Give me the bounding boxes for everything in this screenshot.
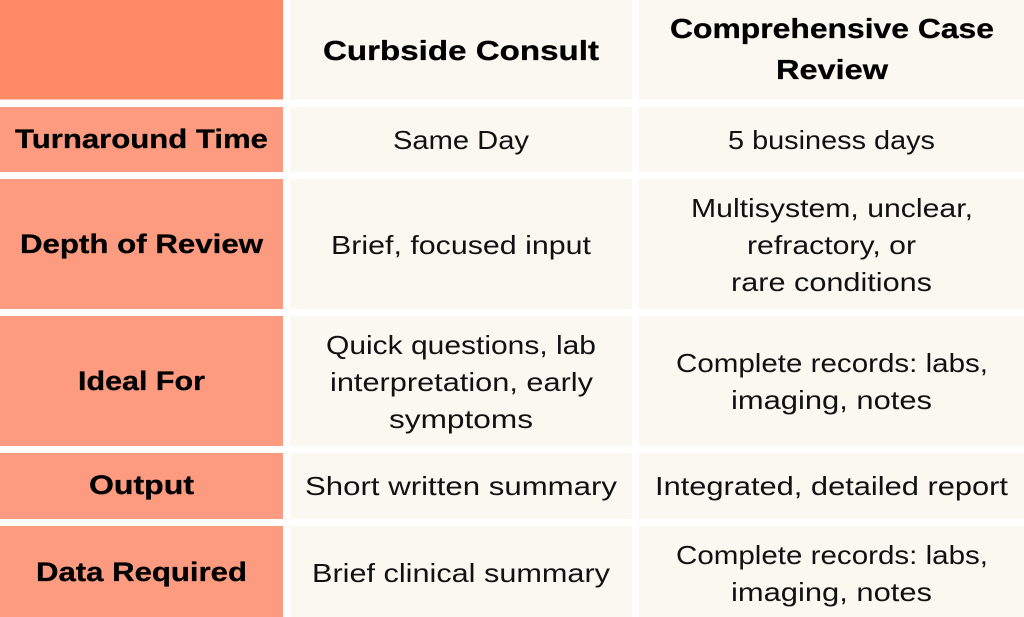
row: Depth of Review	[0, 179, 1024, 309]
empty header corner cell	[0, 0, 283, 100]
cell: Quick questions: symptoms	[389, 404, 533, 434]
column header: Comprehensive Case Review	[639, 0, 1024, 100]
cell: Multisystem conditions: rare conditions	[731, 267, 932, 297]
row label: Depth of Review: Depth of Review	[20, 229, 264, 259]
row label: Ideal For	[0, 316, 283, 446]
cell: Multisystem conditions: Multisystem, unclear,	[691, 193, 973, 223]
cell: Complete records: imaging, notes	[731, 385, 932, 415]
row label: Data Required: Data Required	[36, 557, 247, 587]
cell: Complete records: Complete records: labs,	[676, 540, 988, 570]
cell: Brief clinical summary	[290, 526, 632, 617]
cell: Quick questions: Quick questions, lab	[326, 330, 596, 360]
row label: Ideal For: Ideal For	[78, 366, 206, 396]
cell: Multisystem conditions: refractory, or	[747, 230, 916, 260]
column header: Comprehensive Case Review: Comprehensive Case	[670, 13, 994, 44]
cell: Complete records	[639, 526, 1024, 617]
row label: Turnaround Time: Turnaround Time	[15, 124, 268, 154]
cell: Short written summary	[290, 453, 632, 519]
cell: Brief, focused input: Brief, focused input	[331, 230, 592, 260]
cell: 5 business days	[639, 107, 1024, 172]
row label: Output	[0, 453, 283, 519]
column header: Curbside Consult	[290, 0, 632, 100]
cell: Same Day: Same Day	[393, 125, 529, 155]
cell: Complete records	[639, 316, 1024, 446]
cell: Brief, focused input	[290, 179, 632, 309]
cell: Same Day	[290, 107, 632, 172]
cell: Multisystem conditions	[639, 179, 1024, 309]
row: Data Required	[0, 526, 1024, 617]
cell: Integrated, detailed report	[639, 453, 1024, 519]
column header: Curbside Consult: Curbside Consult	[323, 35, 599, 66]
column header: Comprehensive Case Review: Review	[776, 54, 888, 85]
row: Ideal For	[0, 316, 1024, 446]
cell: Integrated, detailed report: Integrated, detailed report	[655, 471, 1009, 501]
row label: Depth of Review	[0, 179, 283, 309]
cell: Complete records: Complete records: labs,	[676, 348, 988, 378]
cell: Quick questions	[290, 316, 632, 446]
row: Turnaround Time	[0, 107, 1024, 172]
cell: Short written summary: Short written summary	[305, 471, 617, 501]
cell: Quick questions: interpretation, early	[330, 367, 593, 397]
cell: Complete records: imaging, notes	[731, 577, 932, 607]
row label: Data Required	[0, 526, 283, 617]
row label: Output: Output	[89, 470, 194, 500]
cell: 5 business days: 5 business days	[728, 125, 935, 155]
cell: Brief clinical summary: Brief clinical summary	[312, 558, 610, 588]
row label: Turnaround Time	[0, 107, 283, 172]
row: Output	[0, 453, 1024, 519]
